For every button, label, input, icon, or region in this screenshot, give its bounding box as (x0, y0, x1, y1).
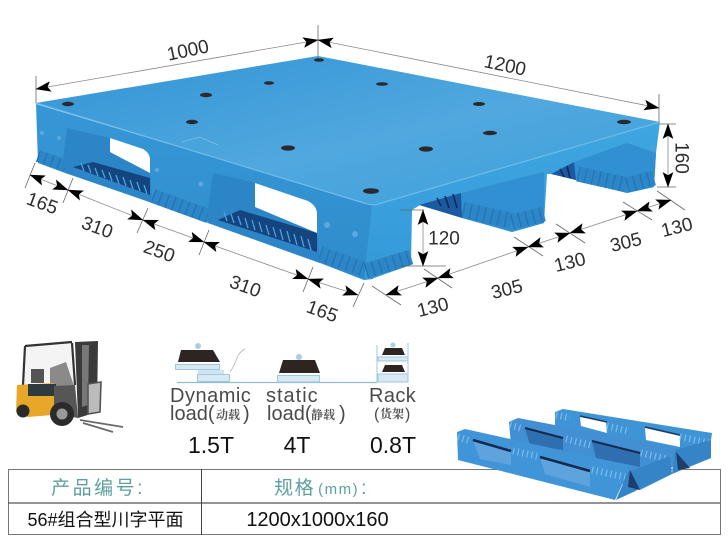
load values (188, 432, 416, 458)
front-face recess one (63, 128, 152, 203)
white pass-through window two (255, 183, 317, 233)
dimension annotations: 130 (552, 249, 588, 277)
dimension annotations: 160 (670, 142, 692, 174)
dimension annotations: 130 (415, 294, 451, 322)
spec table: 产品编号: (51, 477, 145, 499)
middle rail (509, 418, 675, 490)
grating two (218, 210, 317, 252)
load labels: 货架 (380, 405, 404, 422)
spec table (8, 469, 720, 535)
load labels: ) (339, 403, 346, 425)
right side face: post and rails (364, 122, 660, 280)
load values: 0.8T (370, 432, 416, 458)
icon: rack (377, 342, 408, 382)
spec table: 规格(mm): (274, 477, 368, 499)
dimension annotations (24, 25, 695, 327)
load labels: Dynamic (170, 385, 251, 407)
dimension annotations: 165 (304, 297, 340, 327)
back rail (555, 409, 712, 470)
load labels: load( (170, 403, 215, 425)
load labels: static (266, 385, 319, 407)
seat and steering (31, 369, 44, 383)
icon: static load (278, 354, 320, 382)
face bolts (40, 131, 358, 237)
front long face (36, 104, 373, 280)
mast (75, 341, 98, 418)
load values: 1.5T (188, 432, 234, 458)
load labels: Rack (369, 385, 417, 407)
body (16, 383, 57, 417)
load labels: 静载 (311, 406, 336, 423)
cab frame (23, 342, 75, 388)
end deck (616, 456, 672, 500)
load values: 4T (284, 432, 310, 458)
dimension annotations: 1200 (482, 51, 528, 81)
small pallet photo (457, 409, 712, 500)
front-face recess two (208, 173, 320, 263)
rail underside grating (419, 193, 462, 218)
dimension annotations: 305 (489, 276, 525, 304)
top surface holes (62, 58, 631, 194)
dimension annotations: 310 (79, 213, 115, 243)
load labels: 动载 (216, 406, 241, 423)
pallet top surface (36, 56, 660, 205)
dimension annotations: 250 (141, 237, 177, 267)
white pass-through window one (110, 138, 150, 173)
dimension annotations: 120 (428, 228, 460, 250)
spec table: 56#组合型川字平面 (27, 510, 184, 530)
load labels: load( (267, 403, 312, 425)
load labels (170, 385, 417, 425)
icon: dynamic load (176, 343, 377, 382)
dimension annotations: 1000 (165, 36, 211, 66)
dimension annotations: 165 (24, 189, 60, 219)
dimension annotations: 305 (608, 229, 644, 257)
dimension annotations: 310 (227, 272, 263, 302)
rail foot bands (366, 174, 654, 271)
load labels: ( (374, 406, 380, 423)
carriage and forks (88, 382, 101, 414)
dimension annotations: 130 (659, 214, 695, 242)
wheels (50, 402, 74, 426)
front rail (457, 429, 628, 500)
load labels: ) (405, 406, 410, 423)
spec table: 1200x1000x160 (246, 509, 389, 531)
load labels: ) (243, 403, 250, 425)
rail ribs (458, 415, 710, 477)
main pallet (36, 56, 660, 280)
icon: forklift (16, 341, 123, 432)
front foot bands (38, 156, 366, 270)
grating one (73, 162, 150, 195)
rail recess walls (461, 172, 544, 232)
